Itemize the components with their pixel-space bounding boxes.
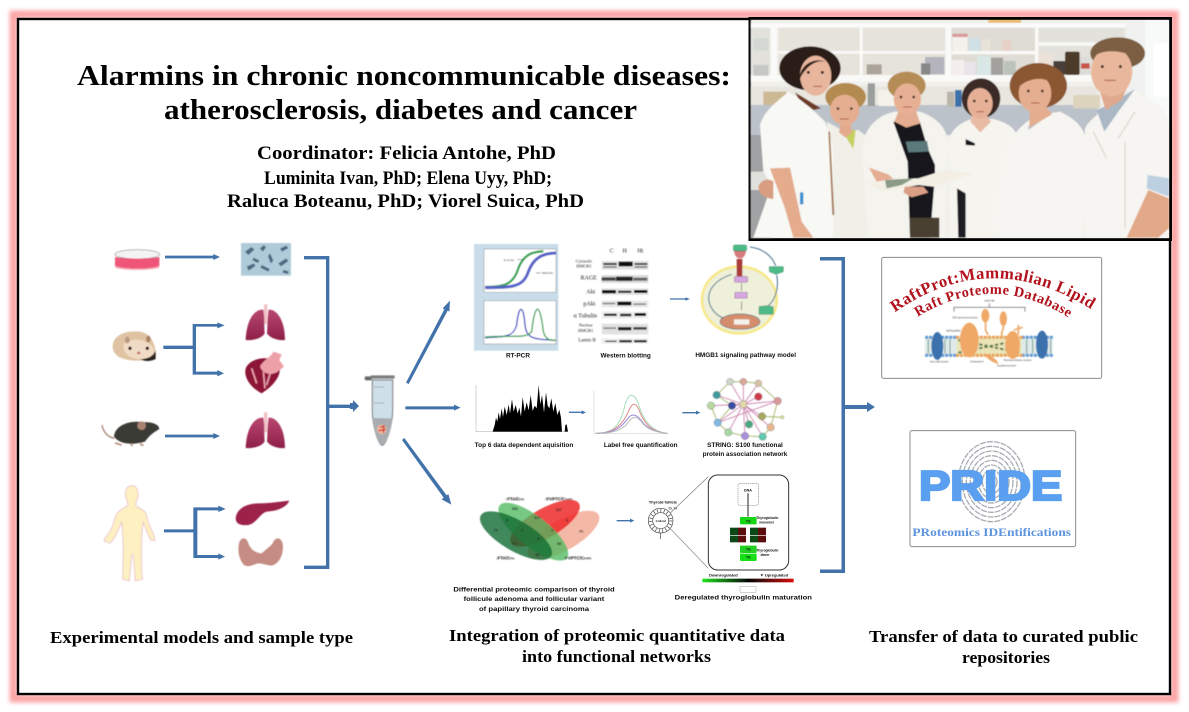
arrow: LFQ to STRING <box>682 411 700 415</box>
section: middle and lower proteomic rows <box>453 378 812 613</box>
person 2 <box>825 83 869 238</box>
authors: Coordinator: Felicia Antohe, PhD <box>257 144 556 164</box>
diagram: thyroglobulin maturation: TG <box>746 556 751 560</box>
arrow: down <box>402 438 451 505</box>
chart: Western blot: Lamin B <box>578 339 596 344</box>
network: STRING <box>707 378 784 440</box>
person 3 <box>862 72 948 238</box>
chart: Venn diagram: 0 <box>537 537 539 541</box>
section: upper row western and PCR <box>474 244 796 360</box>
diagram: thyroglobulin maturation: TG <box>746 548 751 552</box>
section: repositories <box>881 256 1102 548</box>
caption: Western blotting: Western blotting <box>600 353 651 360</box>
icon: lungs <box>246 304 285 340</box>
diagram: thyroglobulin maturation: TG <box>746 519 751 523</box>
diagram: thyroglobulin maturation: Downregulated <box>709 572 738 577</box>
arrow: dish to cells <box>165 254 220 260</box>
diagram: HMGB1 pathway <box>702 245 783 333</box>
chart: Venn diagram: ↑FTA/C FTA <box>505 497 524 502</box>
arrow: hamster tree <box>163 322 225 376</box>
arrow: human tree <box>164 506 226 560</box>
icon: culture dish <box>115 250 160 270</box>
chart: Venn diagram: ↑FVPTC/C FVPTC <box>545 497 573 502</box>
chart: Venn diagram: 73 <box>494 529 498 533</box>
caption: data dependent: Top 6 data dependent aquisition <box>475 442 574 449</box>
bracket: output to repositories <box>820 257 875 573</box>
panel: RaftProt <box>881 256 1102 379</box>
text: PRIDE logo: PRIDE <box>919 462 1062 509</box>
chart: Venn diagram: ↓FTA/C FTA <box>496 555 515 560</box>
diagram: lipid membrane: Lipid raft <box>984 299 995 303</box>
diagram: thyroid follicle: Colloid <box>656 519 666 523</box>
person 5 <box>992 63 1088 238</box>
label: experimental models: Experimental models and sample type <box>50 628 353 647</box>
chart: mass spectrum <box>476 385 570 432</box>
chart: Venn diagram: 517 <box>534 516 540 520</box>
chart: Western blot <box>574 248 648 344</box>
icon: pancreas <box>236 501 289 525</box>
chart: RT-PCR <box>474 244 558 351</box>
diagram: thyroid follicle <box>648 477 708 568</box>
diagram: lipid membrane <box>925 299 1053 368</box>
diagram: thyroglobulin maturation: dimer <box>760 553 770 557</box>
diagram: lipid membrane: Non-raft protein <box>930 360 949 364</box>
chart: Venn diagram: 53 <box>557 542 561 546</box>
chart: Venn diagram: ↓FVPTC/C FVPTC <box>563 555 592 560</box>
diagram: thyroglobulin maturation: Thyroglobulin <box>756 549 778 553</box>
diagram: lipid membrane: Cholesterol <box>970 360 984 364</box>
chart: Venn diagram: 0 <box>551 529 553 533</box>
icon: hamster <box>113 331 156 361</box>
chart: RT-PCR: β Actin <box>504 258 514 262</box>
chart: Venn diagram <box>473 491 606 570</box>
chart: Venn diagram: 8 <box>566 519 568 523</box>
arrow: into tube <box>350 400 359 412</box>
caption: thyroglobulin: Deregulated thyroglobulin maturation <box>675 594 812 601</box>
caption: STRING <box>703 442 788 458</box>
chart: Western blot: Ht <box>637 248 644 254</box>
caption: pathway: HMGB1 signaling pathway model <box>695 352 796 359</box>
bracket: samples <box>304 256 350 569</box>
title: atherosclerosis, diabetes and cancer <box>164 95 637 126</box>
caption: LFQ: Label free quantification <box>604 442 678 449</box>
diagram: thyroid follicle: Thyroid follicle <box>649 500 678 505</box>
chart: Venn diagram: 91 <box>579 529 583 533</box>
label: transfer <box>869 627 1138 667</box>
icon: mouse lungs <box>246 412 285 448</box>
chart: Western blot: Cytosolic <box>576 258 592 263</box>
chart: Western blot: Akt <box>586 289 595 295</box>
diagram: thyroglobulin maturation: DNA <box>744 489 752 493</box>
caption: Venn: Differential proteomic comparison of thyroid <box>453 586 615 593</box>
section: tube and flow arrows <box>365 301 461 505</box>
photo background: laboratory shelves <box>751 20 1169 238</box>
chart: RT-PCR: HMGB1 <box>542 271 554 275</box>
chart: Western blot: H <box>623 248 628 254</box>
caption: Venn: follicule adenoma and follicular variant <box>464 596 604 603</box>
diagram: thyroglobulin maturation: ▼ Upregulated <box>760 572 789 577</box>
label: integration <box>449 626 785 666</box>
chart: Venn diagram: 0 <box>506 519 508 523</box>
text: PRIDE subtitle: PRoteomics IDEntifications <box>912 526 1072 539</box>
title <box>77 61 731 126</box>
person 1 <box>753 46 841 238</box>
label: transfer: repositories <box>962 648 1051 667</box>
icon: heart <box>245 352 284 393</box>
diagram: lipid membrane: Sphingolipid <box>946 328 961 332</box>
chart: Western blot: Nuclear <box>579 323 593 328</box>
label: integration: Integration of proteomic quantitative data <box>449 626 785 645</box>
icon: human body <box>104 486 155 581</box>
label: transfer: Transfer of data to curated public <box>869 627 1138 646</box>
chart: Venn diagram: 77 <box>512 542 516 546</box>
caption: Venn <box>453 586 615 613</box>
icon: mouse <box>102 421 159 446</box>
panel: PRIDE <box>910 431 1076 547</box>
chart: Western blot: HMGB1 <box>578 328 593 333</box>
diagram: lipid membrane: Acylated protein <box>997 364 1017 368</box>
chart: Western blot: α Tubulin <box>574 313 597 319</box>
chart: label free quantification <box>594 391 668 434</box>
diagram: thyroglobulin maturation: monomer <box>759 520 775 524</box>
text: RaftProt arched subtitle: Raft Proteome Database <box>913 286 1071 317</box>
chart: Western blot: C <box>610 248 614 254</box>
chart: Western blot: RAGE <box>581 276 597 282</box>
text: RaftProt arched title: RaftProt:Mammalian Lipid <box>889 268 1096 312</box>
diagram: thyroid follicle: T3, T4 <box>668 507 677 511</box>
open book <box>867 170 975 197</box>
caption: STRING: protein association network <box>703 451 788 458</box>
arrow: spectrum to LFQ <box>569 410 586 414</box>
label: integration: into functional networks <box>522 647 712 666</box>
icon: thyroid <box>238 538 283 566</box>
authors: Raluca Boteanu, PhD; Viorel Suica, PhD <box>227 192 584 212</box>
person 6 <box>1085 37 1169 238</box>
diagram: thyroglobulin maturation <box>702 475 794 592</box>
arrow: up <box>406 301 450 384</box>
caption: RT-PCR: RT-PCR <box>506 353 530 360</box>
title: Alarmins in chronic noncommunicable diseases: <box>77 61 731 92</box>
person 4 <box>948 78 1017 238</box>
chart: Western blot: HMGB1 <box>576 264 592 269</box>
arrow: blot to pathway <box>670 297 690 301</box>
arrow: mouse to lungs <box>165 433 220 439</box>
team photo <box>750 18 1170 240</box>
chart: Venn diagram: 531 <box>512 507 518 511</box>
diagram: lipid membrane: GPI-anchored protein <box>952 315 978 319</box>
caption: STRING: STRING: S100 functional <box>707 442 783 449</box>
arrow: across <box>405 405 461 411</box>
chart: Venn diagram: 227 <box>556 508 562 512</box>
diagram: thyroglobulin maturation: Thyroglobulin <box>756 516 778 520</box>
icon: fingerprint <box>958 442 1025 522</box>
section: experimental models <box>50 243 359 647</box>
chart: Venn diagram: 53 <box>535 553 539 557</box>
icon: cultured cells <box>241 243 291 276</box>
icon: sample tube <box>365 375 395 445</box>
authors: Luminita Ivan, PhD; Elena Uyy, PhD; <box>264 169 552 189</box>
authors <box>227 144 584 212</box>
diagram: lipid membrane: Transmembrane protein <box>1003 358 1032 362</box>
caption: Venn: of papillary thyroid carcinoma <box>479 606 590 613</box>
chart: Venn diagram: 0 <box>521 529 523 533</box>
arrow: Venn to follicle <box>617 519 634 523</box>
chart: Western blot: pAkt <box>583 302 596 308</box>
